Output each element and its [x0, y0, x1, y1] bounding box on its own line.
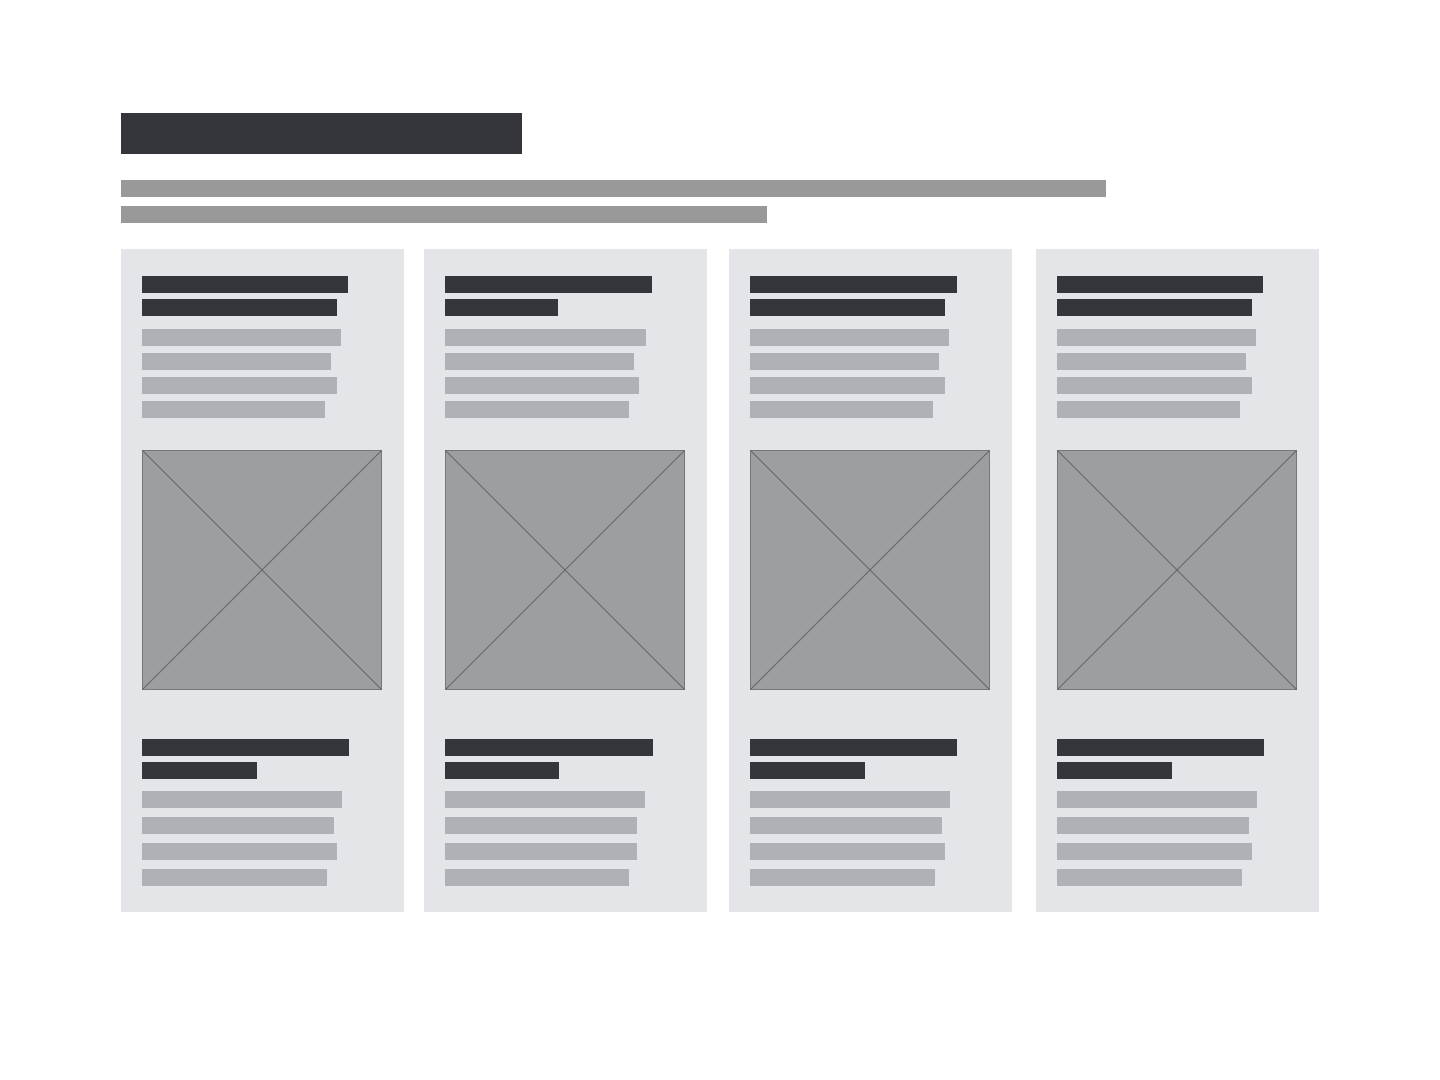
text block: card 2 top	[445, 329, 646, 418]
panel: card 2	[424, 249, 707, 912]
heading: card 1	[142, 276, 348, 316]
subtitle	[121, 180, 1106, 223]
heading: card 2	[445, 276, 652, 316]
panel: card 4	[1036, 249, 1319, 912]
text block: card 1 top	[142, 329, 341, 418]
panel: card 1	[121, 249, 404, 912]
text block: card 2 bottom	[445, 791, 645, 886]
subheading: card 1	[142, 739, 349, 779]
text block: card 4 top	[1057, 329, 1256, 418]
image placeholder: card 1	[142, 450, 382, 690]
subheading: card 2	[445, 739, 653, 779]
heading: card 3	[750, 276, 957, 316]
image placeholder: card 2	[445, 450, 685, 690]
image placeholder: card 4	[1057, 450, 1297, 690]
title	[121, 113, 522, 154]
heading: card 4	[1057, 276, 1263, 316]
text block: card 1 bottom	[142, 791, 342, 886]
panel: card 3	[729, 249, 1012, 912]
text block: card 3 bottom	[750, 791, 950, 886]
text block: card 3 top	[750, 329, 949, 418]
image placeholder: card 3	[750, 450, 990, 690]
text block: card 4 bottom	[1057, 791, 1257, 886]
subheading: card 4	[1057, 739, 1264, 779]
subheading: card 3	[750, 739, 957, 779]
